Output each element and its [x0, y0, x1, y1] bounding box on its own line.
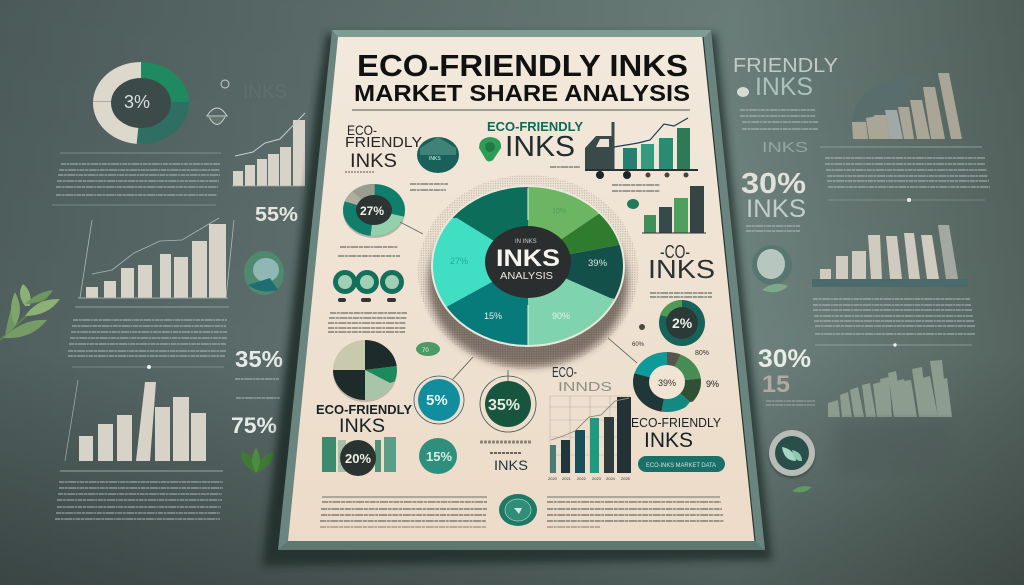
donut chart: right: 39% — [658, 378, 676, 388]
bottom right text block — [547, 497, 724, 527]
percentage: 30% inks: INKS — [746, 195, 806, 223]
dot and label: 60% — [632, 342, 645, 348]
green blob — [627, 199, 639, 209]
faded word: inks: INKS — [762, 139, 808, 156]
bar chart 1 — [820, 73, 982, 147]
title: ECO-FRIENDLY INKS — [357, 48, 688, 83]
icon: round leaf badge — [769, 430, 815, 478]
heading: friendly inks: FRIENDLY — [733, 55, 838, 77]
bottom icon — [499, 494, 537, 526]
small blob: 70 — [422, 348, 429, 354]
connector — [400, 222, 423, 234]
title: MARKET SHARE ANALYSIS — [354, 80, 690, 106]
dot and label: 80% — [695, 350, 709, 357]
heading: eco-friendly inks top left: ECO- — [347, 122, 377, 138]
dot and label — [632, 324, 709, 357]
right side panel — [733, 55, 990, 492]
badge: 15%: 15% — [426, 449, 452, 464]
text near donut — [338, 247, 400, 256]
pie labels: 15% — [484, 311, 502, 321]
small text — [550, 166, 580, 168]
percentages: 30% and 15 — [758, 345, 811, 398]
pill button — [638, 456, 725, 472]
small labels — [235, 379, 280, 398]
heading: eco-friendly inks lower right — [631, 415, 721, 452]
heading: eco-friendly inks top left — [345, 122, 422, 172]
poster shadow — [262, 34, 772, 566]
pie chart: lower left — [333, 340, 397, 402]
icon: glass leaf sphere — [244, 251, 284, 295]
badge: 35% — [480, 376, 536, 432]
dot — [147, 365, 151, 369]
small text — [746, 226, 800, 231]
bar chart: bottom center: 2023 — [592, 476, 602, 481]
small text above pie — [410, 184, 660, 191]
icon: leaf branch — [0, 284, 60, 340]
poster — [262, 30, 772, 566]
main pie chart: INKS — [496, 245, 560, 272]
heading: eco-friendly inks top center: INKS — [505, 131, 575, 163]
icon: teal shield — [417, 137, 459, 173]
percentage: 30% inks — [741, 168, 806, 223]
pie labels — [450, 208, 608, 321]
donut chart: 27%: 27% — [360, 204, 384, 218]
heading: eco-friendly inks lower right: INKS — [644, 429, 693, 452]
heading: eco-friendly inks top center — [487, 119, 583, 163]
bar chart: bottom center — [548, 396, 631, 481]
poster frame — [278, 30, 765, 550]
donut chart: 3%: 3% — [124, 92, 150, 112]
icon: small leaf — [792, 486, 812, 492]
badge: 2%: 2% — [672, 315, 693, 331]
bar chart: bottom center: 2024 — [606, 476, 616, 481]
label: 9%: 9% — [706, 379, 719, 389]
bar chart 2 — [75, 218, 234, 307]
icon: glass orb with leaf — [752, 245, 792, 292]
bar chart: right cluster — [642, 186, 706, 233]
bar chart: top right of left panel — [232, 113, 305, 186]
percentage: 55%: 55% — [255, 204, 298, 226]
dot — [893, 343, 897, 347]
badge: 35%: 35% — [488, 397, 520, 414]
bar chart: bottom center: 2021 — [562, 476, 572, 481]
paper edge — [703, 37, 755, 541]
bar chart: bottom center: 2025 — [621, 476, 631, 481]
dot — [907, 198, 911, 202]
title — [354, 48, 690, 106]
icon: green leaf — [241, 448, 274, 473]
text block 3 — [55, 482, 223, 519]
heading: eco-friendly inks lower left: INKS — [339, 416, 385, 437]
donut chart: 27% — [343, 184, 405, 238]
faded text: inks — [480, 442, 531, 473]
bar chart: bottom center: 2020 — [548, 476, 558, 481]
badge: 15% — [419, 438, 457, 474]
legend circles — [333, 270, 404, 302]
percentage: 30% inks: 30% — [741, 168, 806, 200]
badge: 5% — [414, 376, 464, 424]
pill button: ECO-INKS MARKET DATA — [646, 462, 717, 469]
connectors — [453, 338, 637, 382]
bar chart 2 — [812, 225, 968, 287]
heading: eco-friendly inks lower left: ECO-FRIENDLY — [316, 402, 412, 417]
columns with badge: 20% — [322, 437, 396, 476]
faded smudge under chart — [835, 420, 950, 475]
small blob — [416, 342, 440, 356]
badge: 2% — [659, 300, 705, 346]
small faded text — [740, 110, 818, 129]
donut chart: 3% — [93, 62, 189, 144]
badge: 5%: 5% — [426, 392, 448, 409]
columns with badge: 20%: 20% — [345, 451, 371, 466]
percentage: 35%: 35% — [235, 346, 283, 372]
icon: teal shield: INKS — [429, 156, 441, 162]
faded word: INKS — [243, 82, 287, 103]
text block 1 — [825, 158, 990, 200]
heading: eco trends: ECO- — [552, 364, 577, 381]
heading: eco-friendly inks top center: ECO-FRIENDLY — [487, 119, 583, 134]
small icons — [207, 80, 229, 124]
small text — [650, 293, 712, 297]
right cluster: eco inks: -CO- — [660, 242, 690, 262]
bar chart 3: faded — [828, 360, 952, 417]
text block — [328, 313, 407, 332]
heading: friendly inks: INKS — [755, 73, 813, 101]
bar chart 3 — [60, 380, 223, 471]
pie labels: 27% — [450, 256, 468, 266]
text block 2 — [68, 320, 227, 367]
pie labels: 39% — [588, 258, 608, 269]
heading: eco trends: INNDS — [558, 379, 612, 394]
right cluster: eco inks — [648, 242, 715, 284]
heading: friendly inks — [733, 55, 838, 101]
donut chart: right — [633, 352, 701, 412]
heading: eco trends — [552, 364, 612, 394]
small text — [766, 401, 815, 405]
heading: eco-friendly inks lower right: ECO-FRIENDLY — [631, 415, 721, 430]
faded text: inks: INKS — [494, 457, 528, 473]
poster paper — [288, 37, 755, 541]
heading: eco-friendly inks top left: INKS — [350, 151, 397, 172]
text block 2 — [813, 299, 975, 345]
heading: eco-friendly inks lower left — [316, 402, 412, 437]
main pie chart: ANALYSIS — [500, 270, 553, 282]
bar chart: bottom center: 2022 — [577, 476, 587, 481]
main pie chart: IN INKS — [515, 239, 537, 245]
left side panel — [0, 55, 305, 519]
icon: green badge — [479, 137, 501, 162]
heading: eco-friendly inks top left: FRIENDLY — [345, 134, 422, 151]
pie labels: 90% — [552, 311, 570, 321]
bottom left text block — [320, 497, 487, 527]
pie center — [485, 226, 571, 298]
truck bar chart — [585, 118, 698, 179]
pie labels: 10% — [552, 208, 566, 215]
percentage: 75%: 75% — [231, 413, 277, 438]
percentages: 30% and 15: 30% — [758, 345, 811, 373]
right cluster: eco inks: INKS — [648, 254, 715, 284]
halftone ring — [418, 175, 638, 369]
text block 1 — [52, 153, 221, 205]
percentages: 30% and 15: 15 — [762, 371, 790, 398]
main pie chart — [418, 170, 640, 369]
